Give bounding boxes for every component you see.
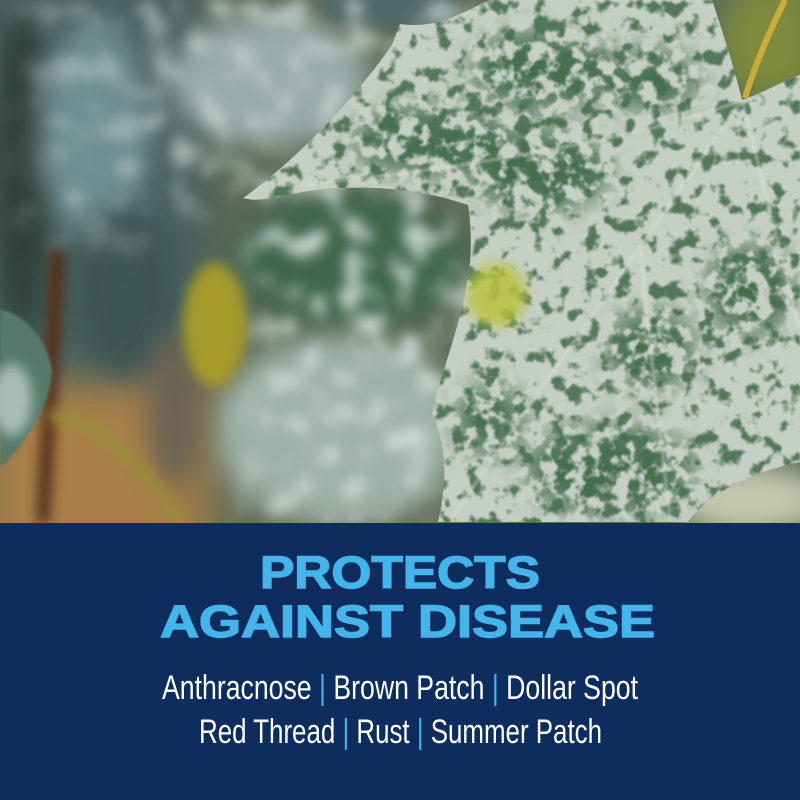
- yellow discoloured patch: [467, 263, 527, 327]
- small leaf at left edge: [0, 310, 52, 468]
- disease list: [162, 669, 638, 751]
- heading: PROTECTS: [260, 547, 540, 598]
- main mildew-covered leaf: [230, 0, 800, 523]
- heading: AGAINST DISEASE: [160, 596, 655, 647]
- navy text panel: [0, 523, 800, 800]
- disease list: Anthracnose | Brown Patch | Dollar Spot: [162, 669, 638, 707]
- dense green patches: [333, 10, 800, 522]
- photo: powdery mildew on a leaf: [0, 0, 800, 570]
- blurred background foliage: [0, 0, 800, 570]
- disease list: Red Thread | Rust | Summer Patch: [199, 713, 602, 751]
- pale leaf veins: [300, 100, 800, 520]
- heading: [160, 547, 655, 647]
- leaf stem: [745, 0, 785, 98]
- scattered green flecks: [230, 0, 800, 523]
